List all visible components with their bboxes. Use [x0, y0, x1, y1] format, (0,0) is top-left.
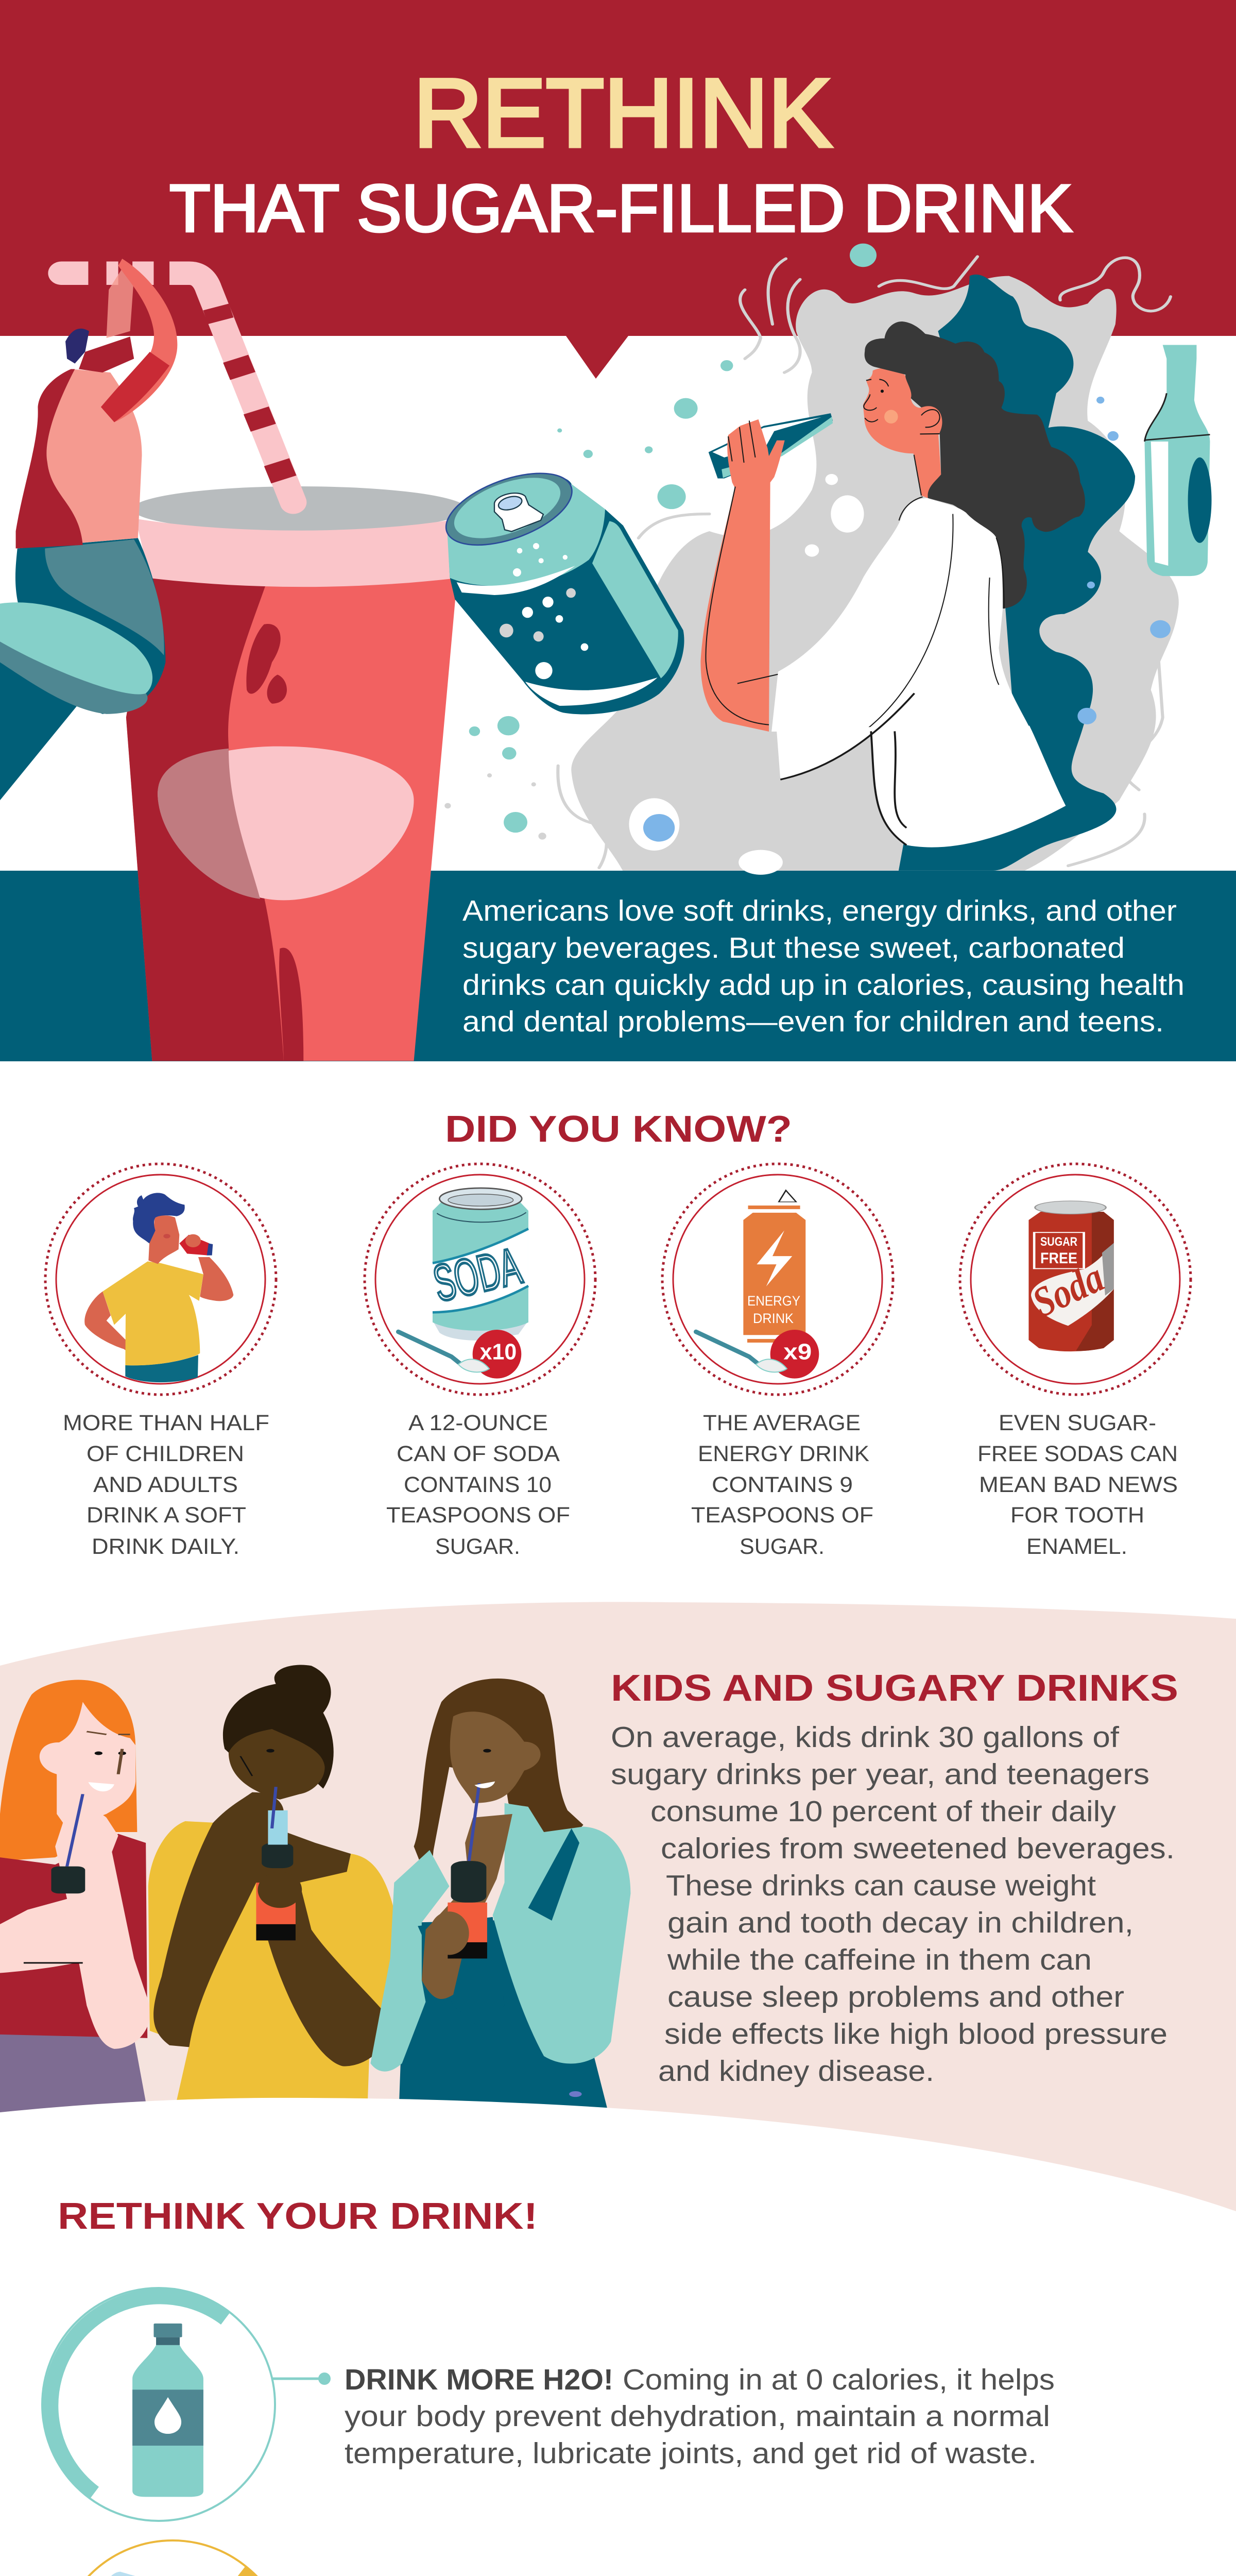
- text block: intro: [462, 894, 1184, 1038]
- bubbles: [469, 244, 877, 833]
- text block: intro: sugary beverages. But these sweet, carbonated: [462, 931, 1125, 964]
- text block: fact 3: THE AVERAGE: [703, 1411, 861, 1435]
- icon: climbing person: [0, 259, 177, 800]
- text block: kids paragraph: [611, 1721, 1175, 2088]
- panel: fact 1 soft drink daily: [45, 1164, 276, 1395]
- connector: [272, 2372, 331, 2385]
- text block: kids paragraph: while the caffeine in them can: [667, 1943, 1092, 1976]
- text block: drink more h2o: [345, 2363, 1055, 2470]
- text block: kids paragraph: These drinks can cause weight: [666, 1869, 1096, 1902]
- text block: fact 3: CONTAINS 9: [712, 1472, 853, 1497]
- text block: fact 2: TEASPOONS OF: [386, 1503, 570, 1528]
- panel: fact 3 energy drink: ENERGY: [747, 1293, 800, 1309]
- text block: kids paragraph: and kidney disease.: [658, 2055, 934, 2088]
- text block: fact 1: DRINK DAILY.: [92, 1534, 239, 1559]
- panel: fact 3 energy drink: [662, 1164, 893, 1395]
- girl 2: [148, 1665, 393, 2100]
- girl 1: [0, 1680, 151, 2132]
- text block: fact 4: MEAN BAD NEWS: [979, 1472, 1178, 1497]
- text block: kids paragraph: side effects like high blood pressure: [664, 2018, 1168, 2050]
- text block: intro: Americans love soft drinks, energy drinks, and other: [462, 894, 1177, 927]
- icon: striped straw: [61, 273, 293, 502]
- icon: spoon of sugar x9: x9: [783, 1340, 812, 1364]
- icon: lemon water pitcher: [98, 2572, 253, 2576]
- text block: fact 4: EVEN SUGAR-: [999, 1411, 1156, 1435]
- text block: fact 1: OF CHILDREN: [87, 1442, 244, 1466]
- text block: fact 2: CAN OF SODA: [397, 1442, 560, 1466]
- text block: fact 3: [691, 1411, 873, 1559]
- icon: spoon of sugar x9: [696, 1330, 819, 1379]
- text block: fact 3: ENERGY DRINK: [698, 1442, 869, 1466]
- bottle in hand: [709, 413, 833, 479]
- title line 2: THAT SUGAR-FILLED DRINK: [169, 171, 1072, 246]
- heading: kids and sugary drinks: KIDS AND SUGARY DRINKS: [611, 1668, 1178, 1709]
- text block: kids paragraph: sugary drinks per year, and teenagers: [611, 1758, 1149, 1791]
- icon: tilted soda can: [437, 459, 684, 715]
- text block: drink more h2o: Coming in at 0 calories, it helps: [623, 2363, 1055, 2396]
- text block: drink more h2o: DRINK MORE H2O!: [345, 2363, 613, 2396]
- header banner: [0, 0, 1236, 379]
- panel: fact 4 sugar free soda: [960, 1164, 1191, 1395]
- text block: fact 1: DRINK A SOFT: [87, 1503, 246, 1528]
- text block: fact 2: A 12-OUNCE: [408, 1411, 548, 1435]
- icon: woman drinking: [700, 321, 1085, 848]
- text block: fact 1: AND ADULTS: [93, 1472, 238, 1497]
- panel: fact 4 sugar free soda: FREE: [1040, 1250, 1077, 1267]
- text block: fact 1: MORE THAN HALF: [63, 1411, 269, 1435]
- text block: drink more h2o: your body prevent dehydration, maintain a normal: [345, 2400, 1050, 2433]
- heading: did you know: DID YOU KNOW?: [445, 1109, 792, 1150]
- teal intro band: [0, 871, 1236, 1061]
- text block: fact 3: TEASPOONS OF: [691, 1503, 873, 1528]
- title: [169, 59, 1072, 246]
- icon: energy can: [743, 1191, 805, 1343]
- arrow: header notch: [566, 336, 628, 379]
- icon: giant soda cup: [61, 273, 467, 1061]
- text block: kids paragraph: cause sleep problems and other: [667, 1980, 1124, 2013]
- panel: jazz it up icon: [56, 2540, 331, 2576]
- icon: water bottle: [132, 2324, 203, 2497]
- text block: fact 3: SUGAR.: [740, 1534, 825, 1559]
- panel: drink more water: [42, 2288, 331, 2521]
- text block: kids paragraph: consume 10 percent of their daily: [650, 1795, 1117, 1828]
- text block: fact 4: [977, 1411, 1178, 1559]
- text block: fact 2: CONTAINS 10: [404, 1472, 552, 1497]
- text block: fact 4: FREE SODAS CAN: [977, 1442, 1178, 1466]
- panel: fact 2 soda can: [365, 1164, 595, 1395]
- text block: fact 4: ENAMEL.: [1026, 1534, 1127, 1559]
- text block: kids paragraph: On average, kids drink 30 gallons of: [611, 1721, 1119, 1754]
- text block: kids paragraph: calories from sweetened beverages.: [661, 1832, 1175, 1865]
- text block: fact 2: SUGAR.: [435, 1534, 520, 1559]
- title line 1: RETHINK: [414, 59, 832, 167]
- grey and teal splash: [444, 244, 1179, 875]
- text block: intro: drinks can quickly add up in calories, causing health: [462, 969, 1184, 1002]
- text block: drink more h2o: temperature, lubricate joints, and get rid of waste.: [345, 2437, 1037, 2470]
- shirt lower part: [777, 693, 1066, 848]
- text block: fact 4: FOR TOOTH: [1010, 1503, 1144, 1528]
- heading: rethink your drink: RETHINK YOUR DRINK!: [58, 2196, 538, 2237]
- icon: soda can: SODA: [428, 1237, 526, 1313]
- icon: green glass bottle: [1144, 345, 1212, 576]
- illustration: three girls drinking: [0, 1665, 630, 2132]
- panel: fact 3 energy drink: DRINK: [753, 1311, 794, 1326]
- icon: sugar free can: [1028, 1201, 1114, 1351]
- icon: spoon of sugar x10: [398, 1330, 521, 1379]
- panel: kids and sugary drinks: [0, 1602, 1236, 2211]
- text block: intro: and dental problems—even for children and teens.: [462, 1005, 1164, 1038]
- girl 3: [370, 1679, 630, 2132]
- icon: boy drinking soda: [84, 1193, 233, 1382]
- text block: kids paragraph: gain and tooth decay in children,: [667, 1906, 1134, 1939]
- text block: fact 2: [386, 1411, 570, 1559]
- panel: fact 4 sugar free soda: Soda: [1025, 1253, 1110, 1326]
- text block: fact 1: [63, 1411, 269, 1559]
- icon: soda can: [428, 1188, 528, 1341]
- icon: spoon of sugar x10: x10: [480, 1340, 517, 1364]
- panel: fact 4 sugar free soda: SUGAR: [1040, 1235, 1077, 1249]
